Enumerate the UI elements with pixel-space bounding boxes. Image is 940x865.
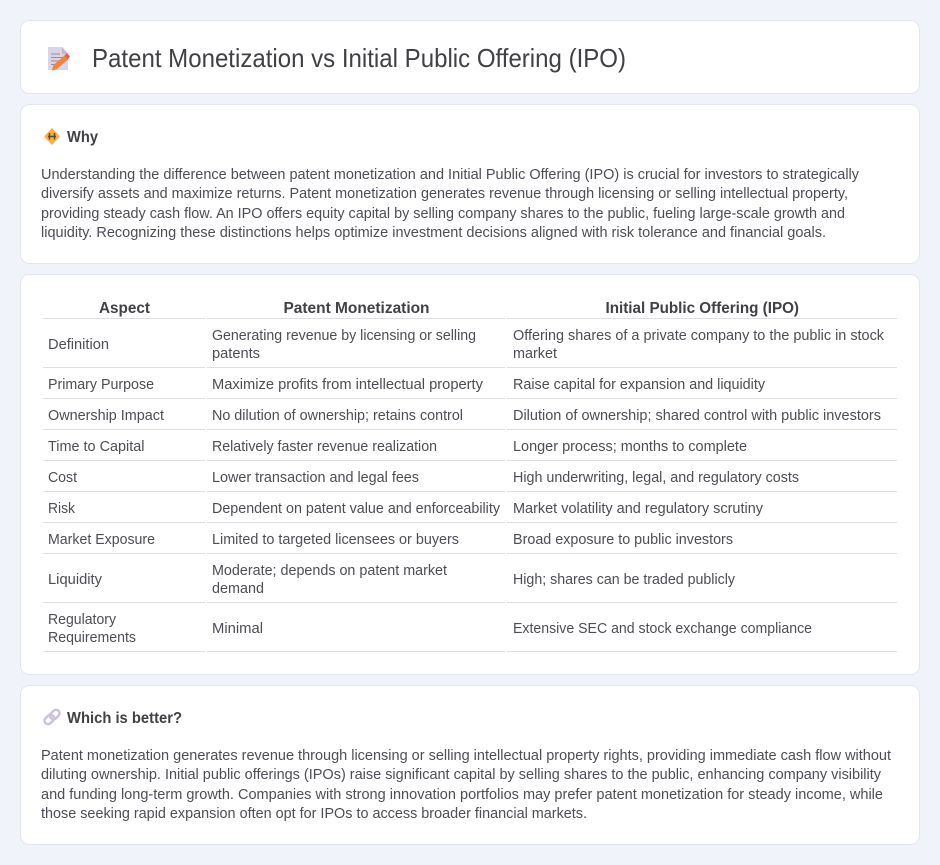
- row: liquidity: demand: [212, 581, 264, 597]
- row: ownership impact: Dilution of ownership; shared control with public investors: [513, 408, 881, 424]
- row: primary purpose: Raise capital for expansion and liquidity: [513, 377, 766, 393]
- row: ownership impact: No dilution of ownership; retains control: [212, 408, 463, 424]
- row: cost: Cost: [48, 470, 77, 486]
- row: market exposure: Broad exposure to public investors: [513, 532, 733, 548]
- row: definition: market: [513, 346, 557, 362]
- row: cost: High underwriting, legal, and regulatory costs: [513, 470, 799, 486]
- title: Patent Monetization vs Initial Public Offering (IPO): [92, 45, 626, 73]
- row: risk: Market volatility and regulatory scrutiny: [513, 501, 764, 517]
- row: risk: Risk: [48, 501, 76, 517]
- icon: link: [43, 708, 61, 726]
- row: regulatory requirements: [43, 612, 897, 652]
- row: definition: Definition: [48, 337, 109, 353]
- row: regulatory requirements: Minimal: [212, 621, 263, 637]
- heading: why: Why: [67, 129, 98, 146]
- row: definition: [43, 328, 897, 368]
- icon: orange diamond: [44, 128, 60, 145]
- row: liquidity: High; shares can be traded publicly: [513, 572, 736, 588]
- row: primary purpose: Primary Purpose: [48, 377, 154, 393]
- row: time to capital: Time to Capital: [48, 439, 144, 455]
- panel: which is better: [20, 686, 920, 844]
- panel: comparison table: [20, 274, 920, 674]
- panel: title header: [20, 20, 920, 94]
- text block: which paragraph: those seeking rapid expansion often opt for IPOs to access broader financial markets.: [41, 806, 587, 822]
- text block: why paragraph: liquidity. Recognizing these distinctions helps optimize investment decisions aligned with risk tolerance and financial goals.: [41, 225, 826, 241]
- text block: which paragraph: and funding long-term growth. Companies with strong innovation portfolios may prefer patent monetization for steady income, while: [41, 787, 883, 803]
- row: definition: patents: [212, 346, 260, 362]
- row: liquidity: Moderate; depends on patent market: [212, 563, 447, 579]
- row: market exposure: Limited to targeted licensees or buyers: [212, 532, 459, 548]
- text block: which paragraph: Patent monetization generates revenue through licensing or selling intellectual property rights, providing immediate cash flow without: [41, 748, 891, 764]
- text block: why paragraph: providing steady cash flow. An IPO offers equity capital by selling company shares to the public, fueling large-scale growth and: [41, 206, 845, 222]
- row: market exposure: [43, 532, 897, 554]
- table header: Aspect: [99, 300, 151, 317]
- row: regulatory requirements: Extensive SEC and stock exchange compliance: [513, 621, 812, 637]
- row: liquidity: [43, 563, 897, 603]
- text block: why paragraph: Understanding the difference between patent monetization and Initial Public Offering (IPO) is crucial for investors to strategically: [41, 167, 860, 183]
- table header: Initial Public Offering (IPO): [606, 300, 799, 317]
- row: market exposure: Market Exposure: [48, 532, 155, 548]
- panel: why: [20, 104, 920, 264]
- row: primary purpose: [43, 377, 897, 399]
- text block: why paragraph: diversify assets and maximize returns. Patent monetization generates revenue through licensing or selling intellectual property,: [41, 186, 848, 202]
- row: ownership impact: Ownership Impact: [48, 408, 164, 424]
- text block: why paragraph: [41, 167, 860, 241]
- row: regulatory requirements: Requirements: [48, 630, 136, 646]
- row: liquidity: Liquidity: [48, 572, 103, 588]
- row: cost: [43, 470, 897, 492]
- row: time to capital: [43, 439, 897, 461]
- table header: [43, 300, 897, 319]
- row: time to capital: Longer process; months to complete: [513, 439, 747, 455]
- row: definition: Offering shares of a private company to the public in stock: [513, 328, 885, 344]
- table header: Patent Monetization: [284, 300, 430, 317]
- row: regulatory requirements: Regulatory: [48, 612, 117, 628]
- row: risk: Dependent on patent value and enforceability: [212, 501, 501, 517]
- text block: which paragraph: diluting ownership. Initial public offerings (IPOs) raise significant capital by selling shares to the public, enhancing company visibility: [41, 767, 882, 783]
- row: cost: Lower transaction and legal fees: [212, 470, 419, 486]
- row: primary purpose: Maximize profits from intellectual property: [212, 377, 484, 393]
- heading: which is better: Which is better?: [67, 710, 182, 727]
- row: risk: [43, 501, 897, 523]
- row: ownership impact: [43, 408, 897, 430]
- icon: memo with pencil: [48, 47, 70, 70]
- text block: which paragraph: [41, 748, 891, 822]
- row: definition: Generating revenue by licensing or selling: [212, 328, 476, 344]
- row: time to capital: Relatively faster revenue realization: [212, 439, 437, 455]
